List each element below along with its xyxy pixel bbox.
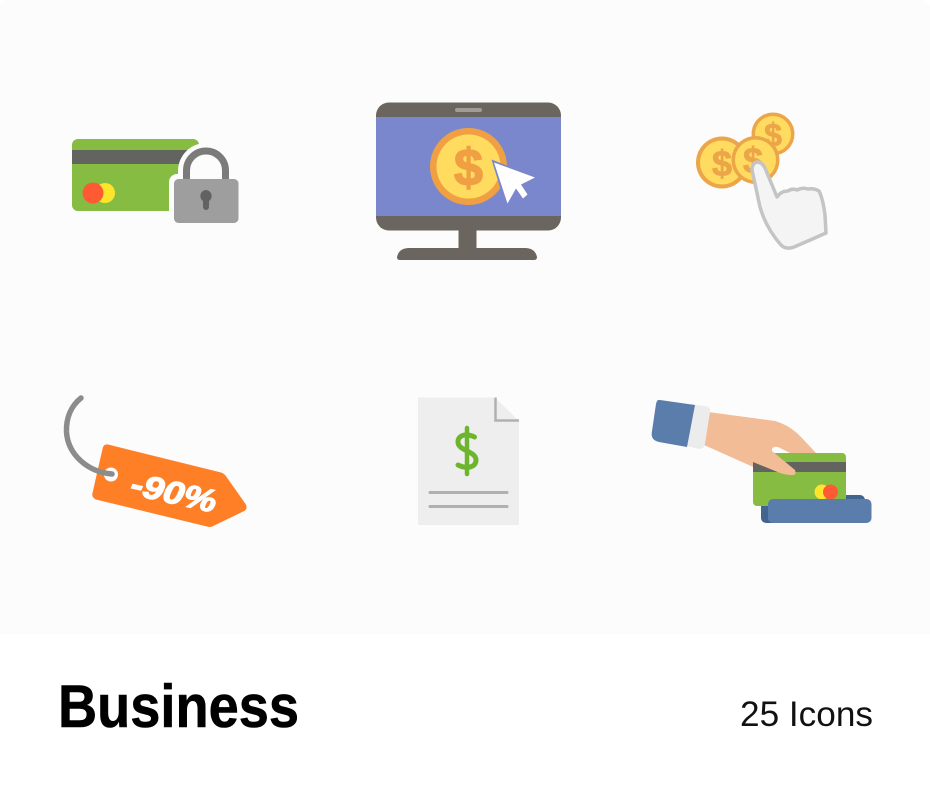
cursor arrow [492, 160, 539, 207]
fingers over card [706, 440, 796, 475]
discount label: -90% [127, 466, 220, 520]
document page [418, 398, 519, 525]
text lines [430, 492, 507, 506]
title: Business [58, 673, 299, 740]
icon: discount price tag [66, 398, 246, 526]
card stripe [72, 150, 199, 164]
card stripe [753, 462, 846, 472]
coin [430, 128, 507, 205]
folded corner [496, 398, 519, 420]
front coin: $ [743, 140, 763, 181]
icon: invoice document [418, 398, 519, 525]
jacket sleeve [652, 400, 695, 447]
icon count: 25 Icons [740, 695, 873, 734]
icon: hand swiping card in terminal [652, 400, 872, 523]
tag string [66, 398, 112, 474]
monitor stand [397, 228, 537, 260]
tag body [93, 445, 246, 526]
left coin: $ [712, 143, 732, 184]
back coin: $ [764, 117, 782, 153]
icon: credit card with padlock [72, 139, 243, 228]
icon: hand tapping coins [696, 112, 826, 248]
card logo [814, 484, 838, 500]
dollar sign [458, 428, 476, 474]
shirt cuff [687, 405, 710, 449]
credit card [72, 139, 199, 211]
terminal back [761, 495, 865, 523]
monitor screen [376, 117, 561, 216]
credit card [753, 453, 846, 506]
card logo [82, 182, 115, 204]
monitor frame [376, 102, 561, 230]
monitor speaker [455, 108, 482, 112]
tag hole [104, 468, 118, 482]
terminal front [768, 499, 872, 523]
hand back [704, 412, 817, 470]
padlock [169, 143, 243, 228]
pointing hand [752, 162, 826, 248]
coin: $ [454, 139, 483, 197]
icon: monitor with dollar coin and cursor [376, 102, 561, 260]
